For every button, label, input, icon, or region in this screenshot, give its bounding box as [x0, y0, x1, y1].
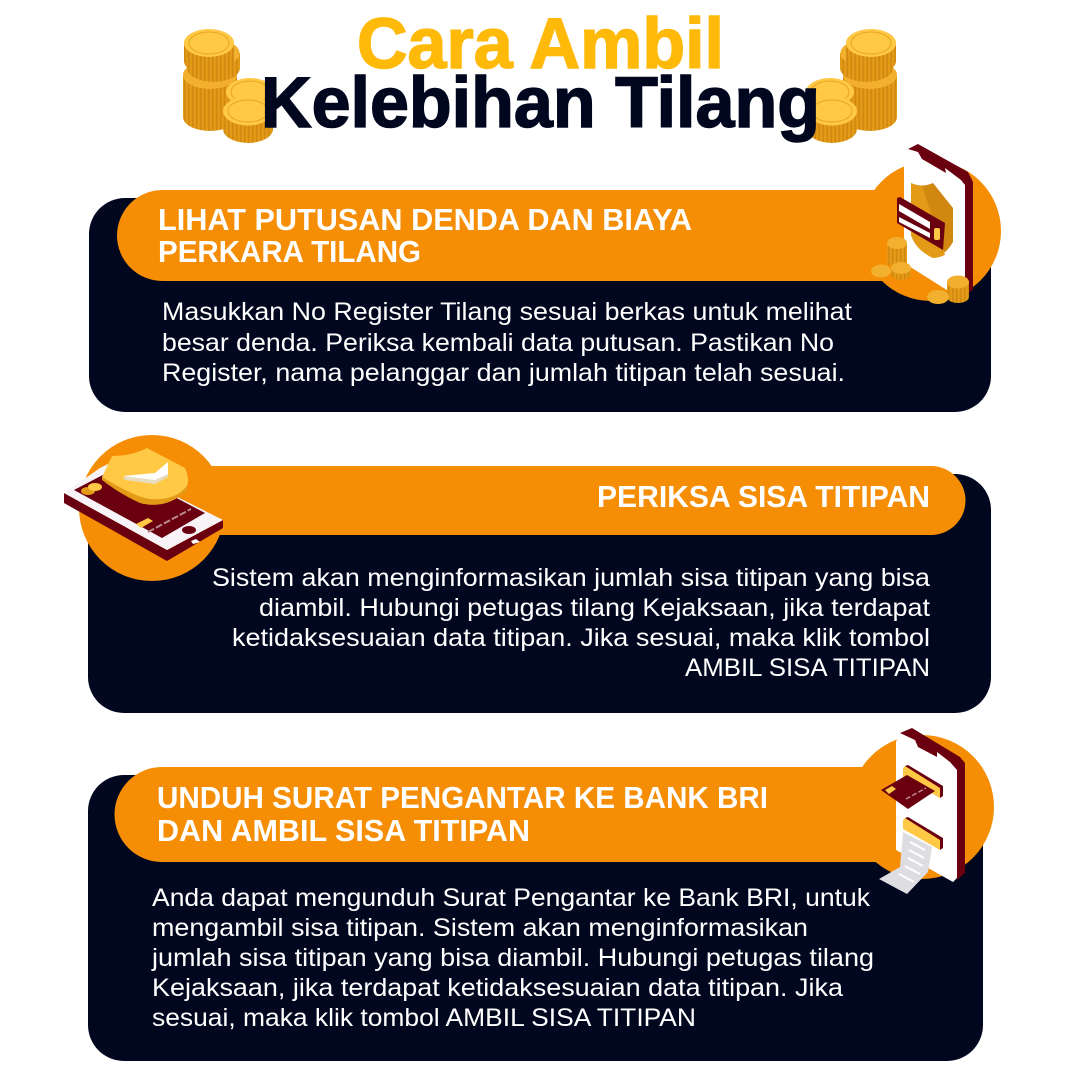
title: [261, 5, 820, 143]
step 3 heading: UNDUH SURAT PENGANTAR KE BANK BRI: [157, 781, 768, 815]
step 1 heading: PERKARA TILANG: [158, 235, 421, 269]
step 2 body text: AMBIL SISA TITIPAN: [685, 654, 930, 682]
step 1 header bar: [117, 190, 905, 281]
step 1 body text: Masukkan No Register Tilang sesuai berkas untuk melihat: [162, 298, 852, 326]
step 3 body text: Anda dapat mengunduh Surat Pengantar ke Bank BRI, untuk: [152, 884, 871, 912]
step 1 body text: besar denda. Periksa kembali data putusan. Pastikan No: [162, 329, 834, 357]
panel: step 3: [88, 728, 994, 1061]
step 3 body text: Kejaksaan, jika terdapat ketidaksesuaian data titipan. Jika: [152, 974, 843, 1002]
icon: coin stacks left: [183, 29, 274, 143]
icon: phone with card and receipt: [850, 728, 994, 894]
title: Kelebihan Tilang: [261, 64, 820, 143]
step 3 body text: [151, 884, 874, 1032]
step 2 body text: ketidaksesuaian data titipan. Jika sesuai, maka klik tombol: [232, 624, 930, 652]
step 2 heading: PERIKSA SISA TITIPAN: [597, 480, 930, 514]
step 1 heading: [158, 203, 692, 269]
step 2 body text: Sistem akan menginformasikan jumlah sisa titipan yang bisa: [212, 564, 930, 592]
step 3 header bar: [115, 767, 900, 862]
step 2 header bar: [150, 466, 966, 535]
icon: phone with credit card and shield: [64, 435, 225, 581]
step 2 body text: diambil. Hubungi petugas tilang Kejaksaan, jika terdapat: [259, 594, 930, 622]
panel: step 2: [64, 435, 991, 713]
step 1 heading: LIHAT PUTUSAN DENDA DAN BIAYA: [158, 203, 692, 237]
step 3 heading: DAN AMBIL SISA TITIPAN: [157, 814, 530, 848]
panel: step 1: [89, 144, 1001, 412]
step 3 body text: sesuai, maka klik tombol AMBIL SISA TITIPAN: [152, 1004, 696, 1032]
step 3 body text: mengambil sisa titipan. Sistem akan menginformasikan: [152, 914, 808, 942]
step 3 body text: jumlah sisa titipan yang bisa diambil. Hubungi petugas tilang: [151, 944, 874, 972]
icon: coin stacks right: [806, 29, 897, 143]
step 2 body text: [212, 564, 930, 682]
step 1 body text: [162, 298, 852, 387]
icon: phone with shield, card and coins: [861, 144, 1001, 304]
step 1 body text: Register, nama pelanggar dan jumlah titipan telah sesuai.: [162, 359, 845, 387]
step 3 heading: [157, 781, 768, 848]
title: Cara Ambil: [357, 5, 724, 84]
